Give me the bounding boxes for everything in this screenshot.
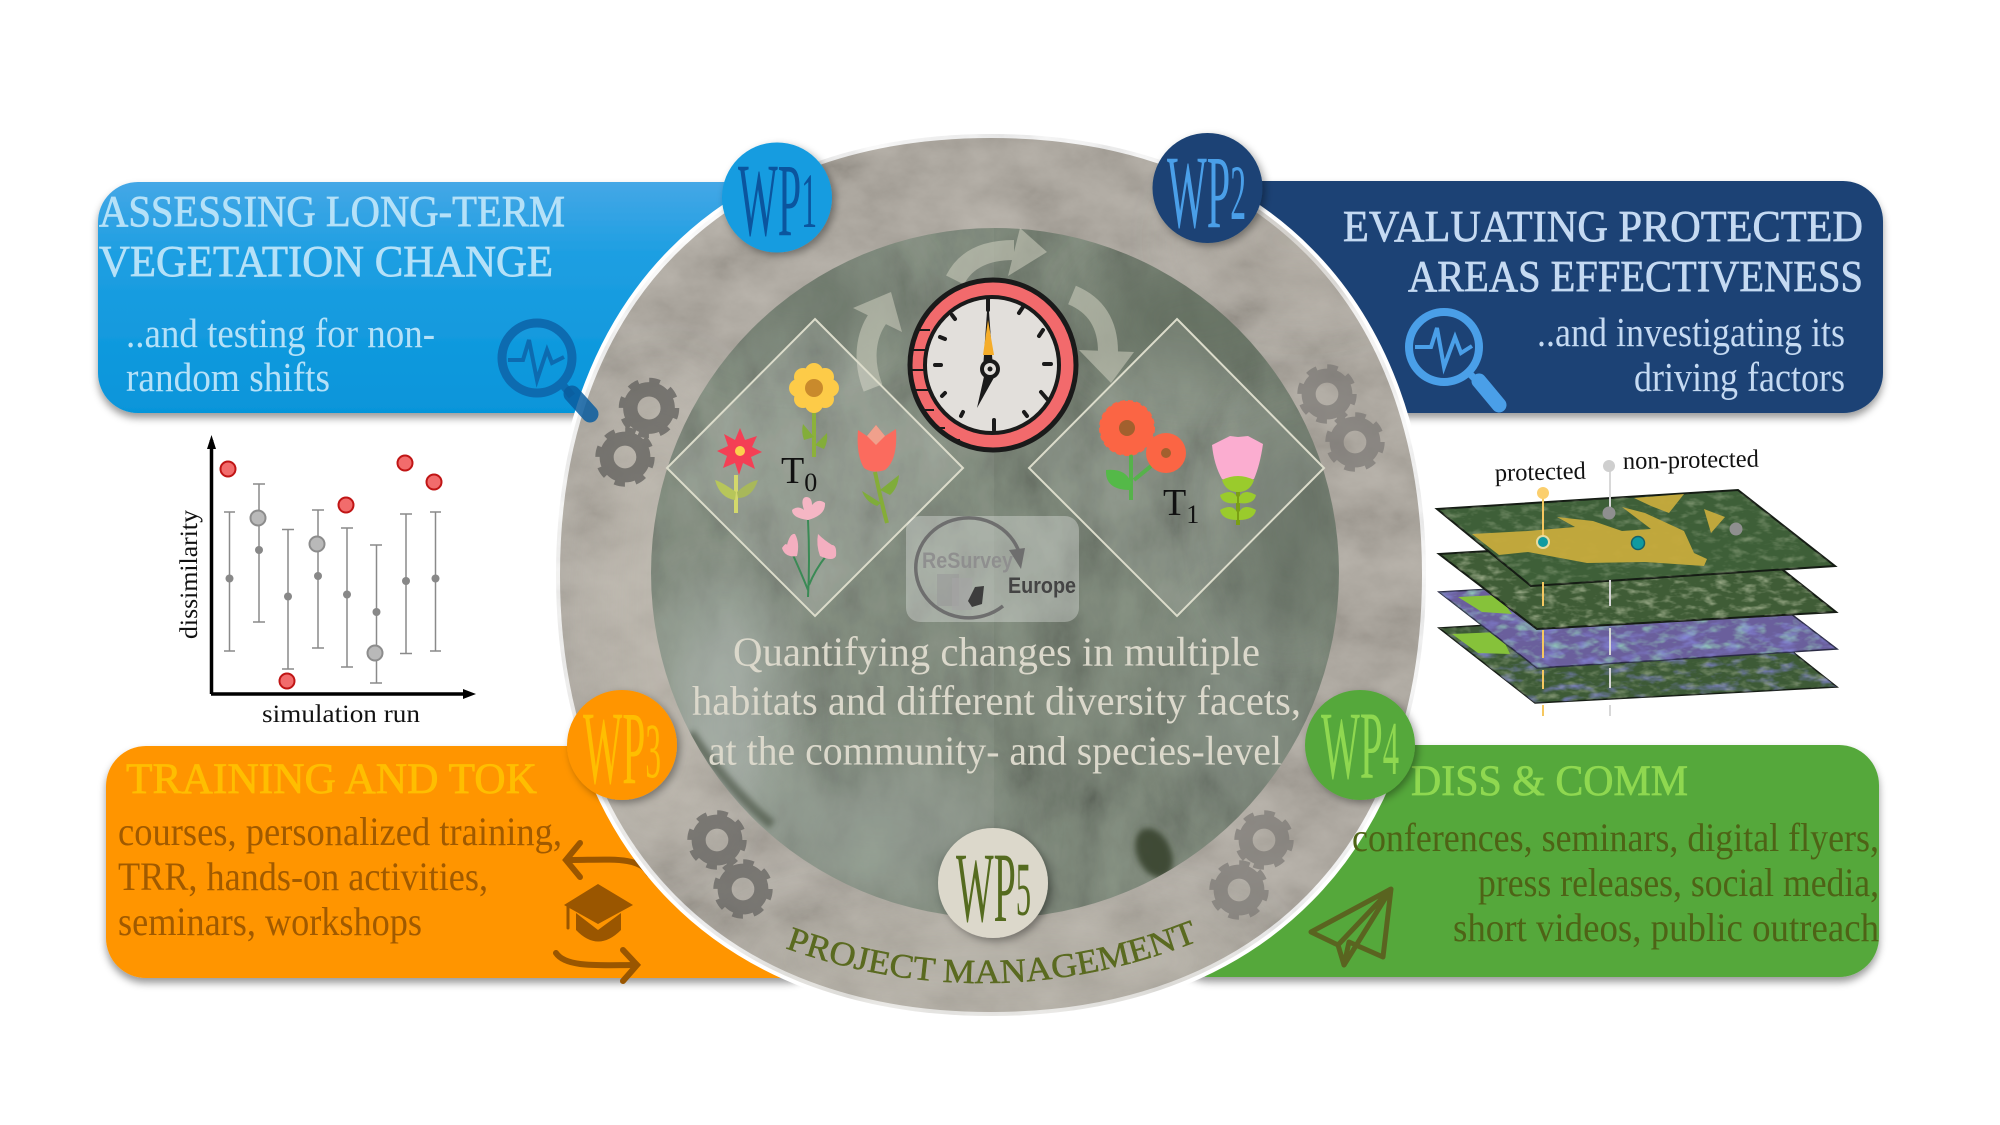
badge: WP3: WP [583,691,739,806]
layer 3 [1439,575,1837,668]
central statement: habitats and different diversity facets, [692,678,1301,724]
label T1: 1 [1186,500,1199,529]
flower: red tulip [858,425,899,523]
WP2 heading [1343,202,1863,301]
map label non-protected: non-protected [1623,446,1760,475]
WP4 body text [1352,815,1879,950]
gears: WP2 pair [1301,368,1381,468]
central statement [692,628,1301,774]
central stone circle [550,130,1430,1020]
WP2 heading: AREAS EFFECTIVENESS [1408,252,1863,301]
WP2 body text: ..and investigating its [1537,309,1845,355]
mean dots [226,546,440,616]
WP4 body text: short videos, public outreach [1453,905,1879,950]
WP3 body text [118,809,562,944]
badge: WP4: WP [1321,692,1465,799]
gears: WP3 pair [691,814,769,915]
WP3 body text: courses, personalized training, [118,809,562,854]
flower: pink tulip [1212,436,1263,525]
WP3 body text: seminars, workshops [118,899,422,944]
logo: ReSurvey Europe: Europe [1008,573,1076,598]
layer 1 with protected areas [1437,490,1835,586]
layer 2 [1439,536,1836,629]
map markers [1537,460,1742,550]
observed red points [220,456,442,688]
central statement: at the community- and species-level [708,728,1282,774]
layer 4 [1439,610,1837,703]
badge: WP2 [1152,133,1262,250]
icon: graduation cap with cycle arrows [556,843,649,981]
badge: WP4: 4 [1383,707,1399,791]
icon: clock [910,280,1076,450]
panel: WP4 dissemination and communication [1170,745,1879,977]
WP1 body text [126,310,435,400]
clock hands [983,297,993,369]
central statement: Quantifying changes in multiple [733,628,1260,674]
gears: WP1 pair [599,382,675,483]
logo: ReSurvey Europe: ReSurvey [922,548,1014,573]
inner darker disc [640,220,1360,930]
panel: WP1 assessing long-term vegetation change [98,182,798,413]
flower: red daisy [715,428,762,513]
badge: WP5 [938,828,1048,943]
map layers stack [1437,446,1837,716]
flower: yellow [789,363,839,457]
badge: WP2: 2 [1230,149,1246,236]
clock ticks [935,299,1051,430]
y axis label: dissimilarity [176,509,203,639]
flower: orange gerberas [1100,401,1186,500]
WP3 heading: TRAINING AND TOK [126,756,537,803]
label T1: T [1163,482,1186,524]
WP4 body text: press releases, social media, [1478,860,1879,905]
WP2 heading: EVALUATING PROTECTED [1343,202,1863,251]
badge: WP1: 1 [801,157,817,244]
badge: WP3 [567,690,677,806]
WP1 heading: ASSESSING LONG-TERM [99,187,565,236]
error bars [224,484,441,683]
WP1 heading: VEGETATION CHANGE [99,237,553,286]
project management arc label: PROJECT MANAGEMENT [786,920,1194,984]
connector lines [1543,466,1610,716]
arrows around clock [853,228,1134,388]
logo: ReSurvey Europe [906,516,1079,622]
WP2 body text: driving factors [1634,354,1845,400]
WP1 body text: ..and testing for non- [126,310,435,356]
x axis label: simulation run [262,701,421,728]
label T0: T [781,450,804,492]
badge: WP5: 5 [1016,848,1031,932]
badge: WP2: WP [1167,135,1323,250]
gears: WP4 pair [1213,814,1290,916]
WP3 body text: TRR, hands-on activities, [118,854,488,899]
diamond: time T1 [1029,319,1324,616]
badge: WP1: WP [738,143,894,258]
WP2 body text [1537,309,1845,400]
chart axes [211,440,470,694]
infographic canvas [92,131,1888,1016]
diamond: time T0 [667,319,963,616]
observed grey points [250,510,382,660]
WP1 heading [99,187,565,286]
icon: WP2 magnifier [1409,312,1499,405]
icon: WP1 magnifier [502,323,590,414]
badge: WP5: WP [956,832,1106,943]
WP4 heading: DISS & COMM [1411,758,1688,805]
badge: WP1 [722,142,832,258]
WP4 body text: conferences, seminars, digital flyers, [1352,815,1879,860]
WP1 body text: random shifts [126,354,330,400]
chart: simulation dissimilarity [176,435,476,728]
flower: pink sprig [782,497,836,597]
panel: WP2 evaluating protected areas effectiveness [1180,181,1883,413]
map label protected: protected [1494,458,1587,487]
icon: paper plane [1311,889,1391,965]
label T0: 0 [804,468,817,497]
panel: WP3 training and ToK [106,746,826,981]
badge: WP4 [1305,690,1415,800]
badge: WP3: 3 [645,707,661,794]
